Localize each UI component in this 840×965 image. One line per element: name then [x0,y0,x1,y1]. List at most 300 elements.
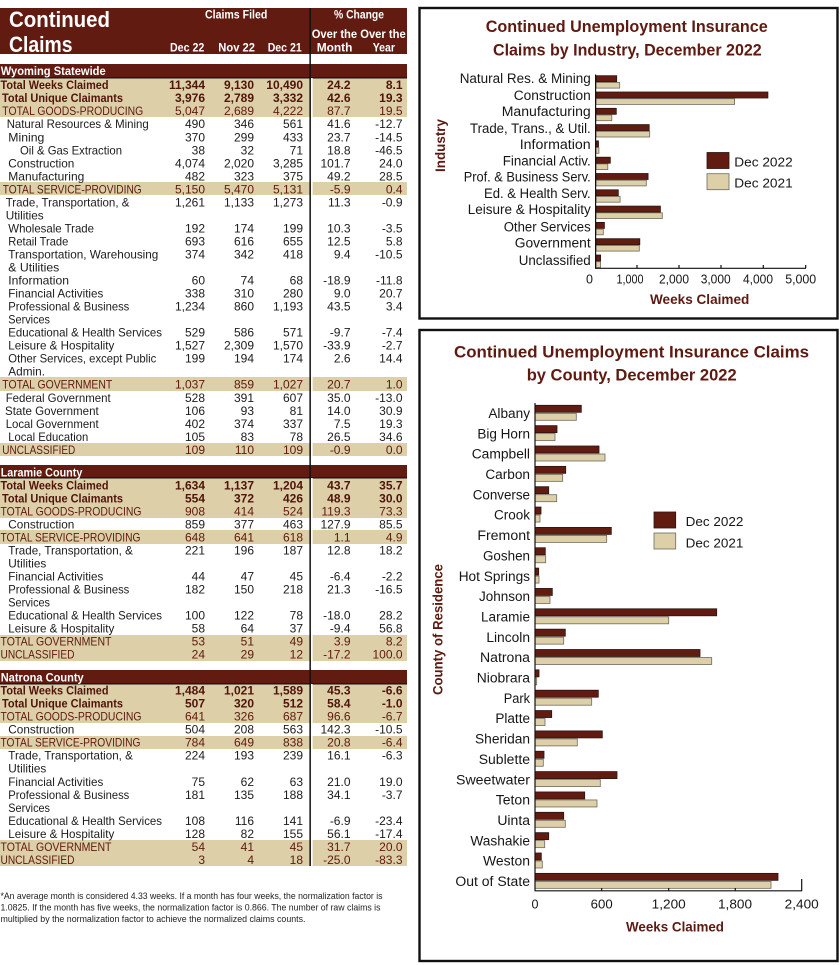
table column headings: Nov 22 [218,40,255,54]
row: total weeks claimed: 10,490 [266,78,303,92]
row: total service-providing: TOTAL SERVICE-PROVIDING [0,736,140,750]
row: construction: 85.5 [379,517,403,531]
row: total unique claimants: 512 [283,697,303,711]
bars: Other Services: Other Services [504,220,591,235]
row: total weeks claimed [0,78,403,92]
row: construction [8,156,403,170]
row: total goods-producing: 414 [234,504,254,518]
row: total goods-producing: 5,047 [175,104,205,118]
row: leisure and hospitality: -9.4 [330,622,351,636]
row: mining: 370 [185,130,205,144]
bars: Natrona [480,650,712,665]
x axis tick labels: 1,200 [652,897,686,911]
row: educational and health services: -6.9 [330,814,351,828]
row: natural resources and mining: 346 [234,117,254,131]
bars: Trade, Trans., & Util. [470,121,650,137]
row: construction: Construction [8,517,74,531]
row: unclassified [0,853,403,867]
row: educational and health services: Educational & Health Services [8,609,162,623]
row: construction: 3,285 [273,156,303,170]
row: state government: State Government [5,404,99,418]
row: unclassified: 18 [290,853,303,867]
row: educational and health services: -18.0 [323,609,351,623]
row: total unique claimants: 30.0 [379,491,403,505]
row: financial activities: 9.0 [334,287,351,301]
bars: Lincoln: Lincoln [486,630,530,645]
row: unclassified: UNCLASSIFIED [0,648,75,662]
bars: Financial Activ.: Financial Activ. [503,153,591,168]
bars: Campbell [472,446,605,462]
row: total unique claimants: -1.0 [382,697,403,711]
row: oil and gas extraction: Oil & Gas Extraction [20,143,122,157]
row: wholesale trade: 199 [283,222,303,236]
bars: Sweetwater [456,772,617,787]
bars: Laramie [481,609,717,624]
row: information [8,274,403,288]
chart title: by industry: Continued Unemployment Insurance [486,17,768,36]
bars: Uinta [497,812,565,828]
row: professional and business services: 188 [283,788,303,802]
row: oil and gas extraction: 71 [290,143,303,157]
bars: Platte [495,711,552,726]
row: total service-providing: 20.8 [327,736,351,750]
section heading: Wyoming Statewide: Wyoming Statewide [1,64,106,78]
row: total government: TOTAL GOVERNMENT [0,635,112,649]
y axis title: County of Residence: County of Residence [430,564,446,695]
row: wholesale trade: 10.3 [327,222,351,236]
row: total goods-producing: TOTAL GOODS-PRODUCING [0,504,142,518]
row: unclassified [2,443,403,457]
row: total weeks claimed [0,684,403,698]
row: unclassified [0,648,403,662]
row: wholesale trade: 174 [234,222,254,236]
row: local education: 105 [185,430,205,444]
row: total service-providing: -6.4 [382,736,403,750]
x axis tick labels: 4,000 [743,272,773,286]
row: information: -11.8 [376,274,403,288]
bars: Crook: Crook [494,508,530,523]
chart title: by county: Continued Unemployment Insurance Claims [454,342,809,361]
row: trade, transportation and utilities: Trade, Transportation, & [8,544,133,558]
row: leisure and hospitality: 1,527 [175,339,205,353]
section: Laramie County [0,466,403,662]
row: trade, transportation and utilities: 196 [234,544,254,558]
row: manufacturing: 28.5 [379,169,403,183]
row: construction: 101.7 [320,156,351,170]
bars: Prof. & Business Serv. [464,170,648,186]
row: trade, transportation and utilities: 12.8 [327,544,351,558]
row: educational and health services [8,326,403,340]
row: total service-providing [0,736,403,750]
bars: Washakie: Washakie [470,833,530,848]
table column headings: Year [373,40,395,54]
bars: Leisure & Hospitality: Leisure & Hospitality [468,202,591,217]
panel: claims by county chart [420,330,838,961]
row: trade, transportation and utilities: 16.1 [327,749,351,763]
row: total goods-producing: 2,689 [224,104,254,118]
row: transportation, warehousing and utilities: Transportation, Warehousing [8,248,158,262]
x axis tick labels: 1,000 [616,272,644,286]
row: transportation, warehousing and utilities: 9.4 [334,248,351,262]
row: professional and business services: 43.5 [327,300,351,314]
row: total unique claimants [2,697,403,711]
row: trade, transportation and utilities: 11.3 [328,195,351,209]
row: professional and business services: Services [8,801,50,815]
bars: Fremont: Fremont [477,528,530,543]
row: information: Information [8,274,69,288]
panel: continued claims table [0,7,407,867]
row: leisure and hospitality: Leisure & Hospitality [8,827,114,841]
x axis tick labels: 0 [532,897,539,911]
row: total unique claimants: Total Unique Claimants [2,91,123,105]
row: total government: 45 [290,840,303,854]
row: educational and health services: -23.4 [375,814,403,828]
row: oil and gas extraction: 38 [192,143,205,157]
bars: Teton: Teton [496,793,530,808]
row: transportation, warehousing and utilities: 342 [234,248,254,262]
row: construction: 127.9 [320,517,351,531]
bars: Government: Government [515,236,591,251]
row: educational and health services: 116 [235,814,254,828]
x axis tick labels: 2,400 [785,897,819,911]
row: total unique claimants: Total Unique Claimants [2,697,123,711]
row: trade, transportation and utilities: Utilities [6,208,44,222]
row: trade, transportation and utilities: 1,133 [224,195,254,209]
row: total unique claimants: 3,332 [273,91,303,105]
row: total weeks claimed: -6.6 [382,684,403,698]
row: professional and business services: Services [8,313,50,327]
row: natural resources and mining: 561 [283,117,303,131]
bars: Albany: Albany [488,406,530,421]
section: Wyoming Statewide [0,64,403,457]
row: unclassified: 110 [235,443,254,457]
row: educational and health services: 586 [234,326,254,340]
bars: Government [515,236,640,251]
legend: Dec 2022 [734,154,793,169]
row: total weeks claimed: Total Weeks Claimed [0,478,108,492]
row: financial activities [8,570,403,584]
x axis tick labels: 0 [586,272,593,286]
row: natural resources and mining: Natural Resources & Mining [7,117,149,131]
row: professional and business services: 182 [185,582,205,596]
row: total service-providing: -5.9 [330,182,351,196]
x axis tick labels: 1,800 [718,897,752,911]
row: unclassified: 100.0 [372,648,403,662]
bars: Fremont [477,527,611,543]
row: total government: 31.7 [327,840,351,854]
row: mining: 299 [234,130,254,144]
row: total unique claimants: 372 [234,491,254,505]
bars: Sheridan [475,731,602,747]
row: other services [8,352,403,379]
row: total government: 20.0 [379,840,403,854]
row: trade, transportation and utilities: 18.2 [379,544,403,558]
row: natural resources and mining [7,117,403,131]
row: other services: Other Services, except Public [8,352,156,366]
row: information: 60 [192,274,205,288]
row: trade, transportation and utilities: Utilities [8,762,46,776]
row: total government [0,840,403,854]
row: leisure and hospitality: 37 [290,622,303,636]
row: state government: 30.9 [379,404,403,418]
row: trade, transportation and utilities: Trade, Transportation, & [6,195,129,209]
row: leisure and hospitality [8,622,403,636]
row: local education: 34.6 [379,430,403,444]
row: local government: 337 [283,417,303,431]
row: leisure and hospitality: 1,570 [273,339,303,353]
row: financial activities: 47 [241,570,254,584]
row: information: -18.9 [323,274,351,288]
row: total unique claimants [2,91,403,105]
row: other services: Admin. [8,365,45,379]
row: total unique claimants: 320 [234,697,254,711]
row: leisure and hospitality: Leisure & Hospitality [8,339,114,353]
section: Natrona County [0,671,403,867]
row: leisure and hospitality: -33.9 [323,339,351,353]
row: financial activities: Financial Activities [8,775,103,789]
table column headings: Month [317,40,352,54]
row: wholesale trade: 192 [185,222,205,236]
row: total weeks claimed: 35.7 [379,478,403,492]
row: state government [5,404,403,418]
row: educational and health services: Educational & Health Services [8,326,162,340]
row: professional and business services [8,788,403,815]
row: construction: 142.3 [320,723,351,737]
legend: Dec 2022 [686,514,743,529]
row: total unique claimants: Total Unique Claimants [2,491,123,505]
row: unclassified: 0.0 [386,443,403,457]
row: total goods-producing: 96.6 [327,710,351,724]
row: manufacturing: 375 [283,169,303,183]
row: construction: 2,020 [224,156,254,170]
row: manufacturing: 482 [185,169,205,183]
row: construction: 4,074 [175,156,205,170]
row: total weeks claimed: 9,130 [224,78,254,92]
row: oil and gas extraction: 18.8 [327,143,351,157]
row: total government: TOTAL GOVERNMENT [2,378,113,392]
bars: Sublette: Sublette [479,752,530,767]
row: trade, transportation and utilities: 221 [185,544,205,558]
table column headings: Dec 22 [170,40,205,54]
x axis title: Weeks Claimed [650,291,749,307]
row: educational and health services: 529 [185,326,205,340]
bars: Sheridan: Sheridan [475,732,530,747]
row: trade, transportation and utilities: Utilities [8,556,46,570]
row: local education [8,430,403,444]
row: construction: 377 [234,517,254,531]
row: total government: 1.0 [386,378,403,392]
row: educational and health services: 571 [283,326,303,340]
row: federal government [6,391,403,405]
row: manufacturing: Manufacturing [8,169,84,183]
row: leisure and hospitality: -2.7 [382,339,403,353]
row: professional and business services: 1,193 [273,300,303,314]
row: unclassified: 4 [247,853,254,867]
table column headings: Over the Over the [312,27,406,41]
row: unclassified: 24 [192,648,205,662]
row: mining: -14.5 [375,130,403,144]
row: total government: 41 [241,840,254,854]
bars: Lincoln [486,629,565,645]
row: total service-providing: 1.1 [334,530,351,544]
bar chart: weeks claimed by industry [460,71,816,286]
bars: Leisure & Hospitality [468,202,662,218]
row: total service-providing: 5,470 [224,182,254,196]
row: trade, transportation and utilities: 239 [283,749,303,763]
row: trade, transportation and utilities: 193 [234,749,254,763]
row: total service-providing: TOTAL SERVICE-PROVIDING [3,182,142,196]
row: oil and gas extraction [20,143,403,157]
row: total goods-producing [0,504,403,518]
row: financial activities [8,287,403,301]
row: construction: 504 [185,723,205,737]
row: total weeks claimed: 11,344 [169,78,205,92]
row: professional and business services: -16.5 [375,582,403,596]
row: total service-providing [0,530,403,544]
row: professional and business services: 135 [234,788,254,802]
row: total service-providing: 838 [283,736,303,750]
row: total service-providing: 784 [185,736,205,750]
row: local government: 19.3 [379,417,403,431]
row: total goods-producing: 19.5 [379,104,403,118]
row: unclassified: 3 [198,853,205,867]
bars: Platte: Platte [495,711,530,726]
row: professional and business services: Professional & Business [8,582,129,596]
row: unclassified: 12 [290,648,303,662]
row: total weeks claimed: 1,484 [175,684,205,698]
row: state government: 14.0 [327,404,351,418]
bars: Trade, Trans., & Util.: Trade, Trans., & Util. [470,121,591,136]
bars: Uinta: Uinta [497,813,531,828]
bars: Big Horn [477,426,557,441]
table column headings [170,7,406,54]
bars: Prof. & Business Serv.: Prof. & Business Serv. [464,170,591,184]
row: natural resources and mining: 41.6 [327,117,351,131]
row: total goods-producing: 524 [283,504,303,518]
row: trade, transportation and utilities: 187 [283,544,303,558]
row: professional and business services [8,582,403,610]
bars: Hot Springs: Hot Springs [459,569,530,584]
row: local government: 402 [185,417,205,431]
bars: Albany [488,405,581,421]
x axis title: Weeks Claimed [626,919,724,935]
row: total service-providing: 0.4 [386,182,403,196]
row: retail trade [8,234,403,248]
row: other services: 174 [283,352,303,366]
bars: Construction [514,88,768,104]
bars: Carbon [485,466,566,482]
row: financial activities: 19.0 [379,775,403,789]
row: educational and health services: 100 [185,609,205,623]
row: information: 74 [241,274,254,288]
row: total weeks claimed: Total Weeks Claimed [0,684,108,698]
bars: Teton [496,792,597,808]
row: professional and business services: 860 [234,300,254,314]
chart title: by industry: Claims by Industry, December 2022 [493,41,762,60]
row: local education: Local Education [8,430,88,444]
row: unclassified: -17.2 [323,648,351,662]
row: leisure and hospitality: 58 [192,622,205,636]
bars: Construction: Construction [514,88,591,103]
row: retail trade: Retail Trade [8,234,69,248]
table title: Continued [9,7,110,32]
footnote: multiplied by the normalization factor to achieve the normalized claims counts. [0,914,306,924]
row: professional and business services: 21.3 [327,582,351,596]
row: professional and business services: 181 [185,788,205,802]
row: total unique claimants: 3,976 [175,91,205,105]
row: educational and health services [8,814,403,828]
bars: Natural Res. & Mining: Natural Res. & Mining [460,71,591,86]
row: retail trade: 616 [234,234,254,248]
row: total service-providing: TOTAL SERVICE-PROVIDING [0,530,140,544]
row: local government: 374 [234,417,254,431]
row: educational and health services: Educational & Health Services [8,814,162,828]
row: unclassified: 109 [283,443,303,457]
row: financial activities: 21.0 [327,775,351,789]
row: unclassified: 109 [185,443,205,457]
bars: Big Horn: Big Horn [477,426,530,441]
row: total weeks claimed: 8.1 [386,78,403,92]
x axis tick labels: 3,000 [701,272,731,286]
row: total service-providing: 618 [283,530,303,544]
legend: Dec 2021 [734,176,793,191]
row: financial activities: 63 [290,775,303,789]
row: financial activities: 62 [241,775,254,789]
row: total government: TOTAL GOVERNMENT [0,840,112,854]
row: professional and business services: Professional & Business [8,300,129,314]
row: total service-providing: 4.9 [386,530,403,544]
row: trade, transportation and utilities: 224 [185,749,205,763]
row: construction: 463 [283,517,303,531]
footnote [0,891,383,924]
row: transportation, warehousing and utilities: & Utilities [8,260,59,274]
row: educational and health services: 122 [234,609,254,623]
row: construction: Construction [8,156,74,170]
row: total weeks claimed: 24.2 [327,78,351,92]
row: leisure and hospitality: 56.1 [327,827,351,841]
row: other services: 199 [185,352,205,366]
row: professional and business services: 34.1 [327,788,351,802]
section heading: Natrona County: Natrona County [1,671,84,685]
bars: Park [504,690,598,706]
row: total government: 859 [234,378,254,392]
row: trade, transportation and utilities: Trade, Transportation, & [8,749,133,763]
row: construction: -10.5 [375,723,403,737]
bars: Converse [473,487,557,502]
row: information: 68 [290,274,303,288]
row: federal government: 35.0 [327,391,351,405]
row: federal government: 528 [185,391,205,405]
bars: Out of State: Out of State [455,874,530,889]
row: total goods-producing [0,710,403,724]
row: retail trade: 693 [185,234,205,248]
row: financial activities: Financial Activities [8,287,103,301]
row: total government: 49 [290,635,303,649]
row: unclassified: UNCLASSIFIED [0,853,75,867]
row: leisure and hospitality [8,827,403,841]
row: professional and business services: 218 [283,582,303,596]
footnote: 1.0825. If the month has five weeks, the normalization factor is 0.866. The number of raw claims is [0,902,381,912]
table column headings: % Change [334,7,384,21]
row: professional and business services: Professional & Business [8,788,129,802]
row: total unique claimants: 48.9 [327,491,351,505]
row: financial activities: 310 [234,287,254,301]
row: total weeks claimed: 45.3 [327,684,351,698]
row: total goods-producing: 73.3 [379,504,403,518]
row: total service-providing: 641 [234,530,254,544]
row: leisure and hospitality: 155 [283,827,303,841]
row: financial activities: -6.4 [330,570,351,584]
